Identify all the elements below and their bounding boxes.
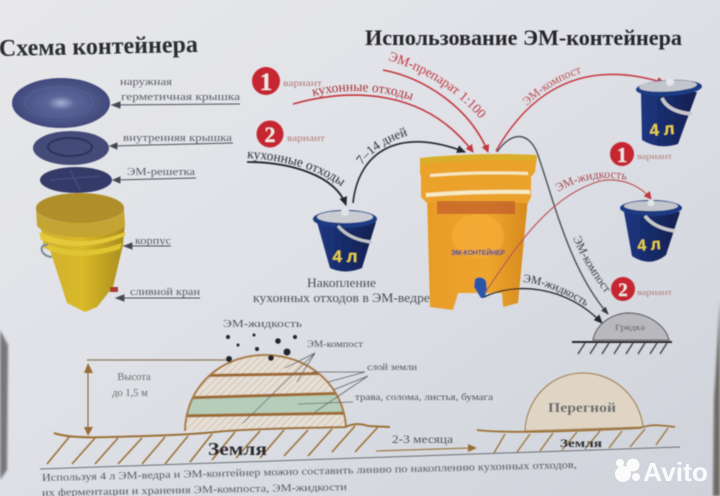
- bucket: right middle: 4 л: [637, 236, 661, 255]
- badge: variant 2 left: вариант: [287, 133, 325, 143]
- arrow: body: [124, 243, 171, 249]
- label: EM-liquid drops: ЭМ-жидкость: [223, 319, 302, 330]
- badge: variant 2 left: [256, 120, 325, 148]
- arrow: kitchen waste red: кухонные отходы: [312, 84, 414, 101]
- baseline: [40, 447, 680, 469]
- labels: mound layers: слой земли: [367, 362, 417, 372]
- badge: variant 2 left: 2: [264, 122, 276, 147]
- labels: mound layers: трава, солома, листья, бумага: [355, 392, 494, 403]
- arrow: EM-compost red: [494, 67, 662, 152]
- arrow: kitchen waste black: [246, 151, 348, 206]
- arrow: EM-liquid black: ЭМ-жидкость: [522, 274, 588, 306]
- arrow: kitchen waste black: кухонные отходы: [246, 151, 346, 187]
- arrow: EM-preparation: ЭМ-препарат 1:100: [388, 51, 486, 118]
- label: EM-liquid drops: [223, 319, 302, 362]
- label: outer lid: [120, 77, 241, 103]
- icon: outer lid: [12, 78, 110, 128]
- badge: variant 1 left: [252, 67, 322, 96]
- bucket: right top: 4 л: [649, 119, 675, 140]
- arrow: 2-3 months: 2-3 месяца: [392, 434, 453, 446]
- ground under mound: [47, 424, 390, 464]
- label: EM mesh: ЭМ-решетка: [127, 167, 196, 178]
- arrow: EM-liquid black: [484, 274, 603, 324]
- label: drain tap: сливной кран: [130, 287, 201, 298]
- label: outer lid: герметичная крышка: [121, 92, 241, 103]
- arrow: EM-compost gray: [496, 135, 610, 316]
- small mound: bed: Грядка: [615, 323, 646, 332]
- height marker: Высота: [117, 372, 151, 383]
- badge: variant 1 left: 1: [260, 69, 272, 96]
- arrow: EM-compost red: ЭМ-компост: [522, 67, 580, 106]
- badge: variant 1 right: 1: [617, 143, 627, 167]
- labels: mound layers: [243, 339, 494, 423]
- arrow: 2-3 months: [376, 434, 477, 452]
- heading: earth left: Земля: [208, 439, 267, 459]
- title: container use: Использование ЭМ-контейнера: [365, 25, 682, 50]
- label: outer lid: наружная: [120, 77, 173, 88]
- humus mound: [525, 373, 643, 431]
- text: collection caption: Накопление: [307, 275, 376, 290]
- text: collection caption: кухонных отходов в ЭМ-ведре: [253, 290, 430, 305]
- arrow: EM-liquid red: [484, 172, 652, 294]
- main EM container: [420, 154, 537, 310]
- small mound: bed: [572, 313, 672, 354]
- title: container scheme: Схема контейнера: [0, 32, 198, 62]
- arrow: EM mesh: [113, 177, 196, 183]
- arrow: EM-liquid red: ЭМ-жидкость: [554, 172, 627, 192]
- badge: variant 1 right: вариант: [637, 152, 673, 161]
- height marker: [84, 360, 226, 436]
- badge: variant 2 right: вариант: [637, 288, 673, 297]
- height marker: до 1,5 м: [112, 388, 148, 399]
- bucket: right top: [636, 78, 702, 146]
- footer text: Используя 4 л ЭМ-ведра и ЭМ-контейнер можно составить линию по накоплению кухонных отходов,: [42, 460, 577, 484]
- heading: earth right: Земля: [560, 436, 603, 450]
- labels: mound layers: ЭМ-компост: [307, 339, 363, 349]
- icon: inner lid: [33, 131, 109, 165]
- arrow: 7-14 days: 7–14 дней: [355, 126, 408, 164]
- humus mound: Перегной: [548, 401, 616, 416]
- text: collection caption: [253, 275, 430, 305]
- arrow: drain tap: [116, 295, 200, 301]
- arrow: outer lid: [112, 102, 240, 108]
- watermark: Avito: Avito: [643, 457, 708, 487]
- badge: variant 2 right: [611, 277, 673, 301]
- label: body: корпус: [135, 236, 172, 247]
- arrow: EM-compost gray: ЭМ-компост: [572, 235, 610, 293]
- bucket: collection: [313, 208, 377, 272]
- footer text: [42, 460, 577, 496]
- arrow: inner lid: [110, 143, 233, 149]
- badge: variant 1 right: [610, 142, 673, 167]
- main EM container: ЭМ-КОНТЕЙНЕР: [451, 248, 505, 257]
- compost mound cross-section: [180, 355, 350, 431]
- badge: variant 2 right: 2: [618, 280, 628, 301]
- badge: variant 1 left: вариант: [283, 78, 322, 88]
- ground under humus: [477, 425, 675, 453]
- bucket: right middle: [620, 200, 682, 262]
- arrow: 7-14 days: [352, 126, 466, 204]
- right edge shadow: [713, 300, 720, 496]
- arrow: kitchen waste red: [292, 84, 474, 154]
- arrow: EM-preparation: [382, 51, 490, 154]
- icon: yellow bucket body: [36, 193, 125, 312]
- icon: EM mesh: [40, 167, 112, 193]
- panel: container scheme: [12, 77, 241, 312]
- left edge shadow: [0, 330, 8, 480]
- watermark: Avito: [615, 457, 708, 487]
- label: inner lid: внутренняя крышка: [123, 133, 233, 144]
- bucket: collection: 4 л: [333, 247, 357, 266]
